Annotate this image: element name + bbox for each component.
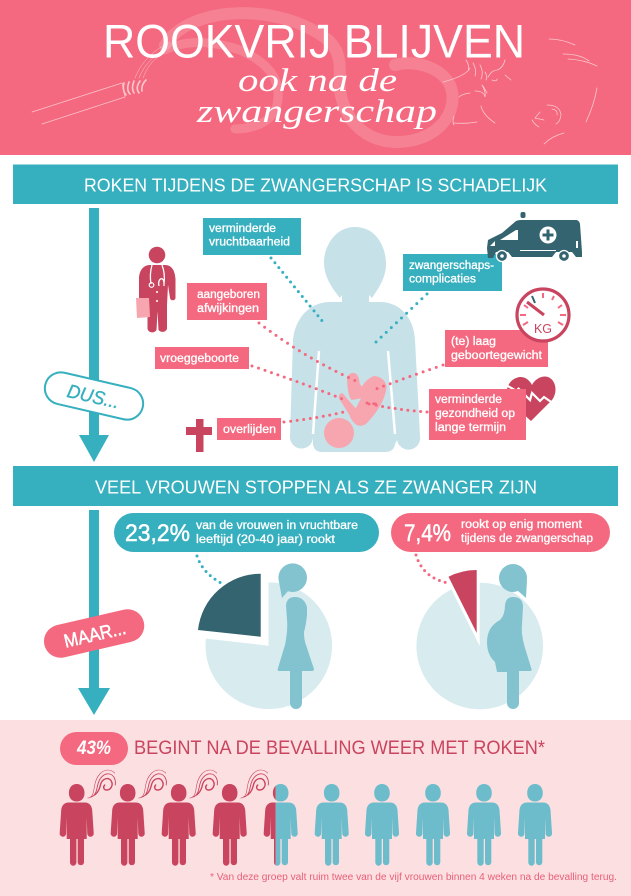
subtitle: ook na de	[238, 63, 397, 99]
pie chart: 23,2%	[197, 556, 332, 709]
heading: begint weer met roken: BEGINT NA DE BEVALLING WEER MET ROKEN*	[134, 737, 545, 759]
label: te laag geboortegewicht: (te) laag	[451, 336, 496, 348]
smoke swirl background	[165, 13, 453, 142]
label: overlijden	[217, 418, 281, 440]
arrow: second down arrow	[78, 510, 110, 715]
title: ROOKVRIJ BLIJVEN	[103, 14, 525, 68]
footnote: * Van deze groep valt ruim twee van de vijf vrouwen binnen 4 weken na de bevalling terug.	[210, 872, 617, 883]
badge: 43%	[60, 732, 128, 765]
badge: dus	[42, 369, 146, 423]
label: verminderde gezondheid: verminderde	[435, 394, 502, 406]
label: overlijden: overlijden	[223, 424, 276, 436]
callout: 23,2%: van de vrouwen in vruchtbare	[196, 520, 358, 532]
callout: 7,4%: tijdens de zwangerschap	[461, 533, 593, 545]
label: verminderde gezondheid	[429, 389, 526, 440]
section heading: stoppen	[13, 466, 618, 506]
icon: doctor	[136, 247, 176, 332]
badge: maar: MAAR...	[62, 618, 128, 653]
label: vroeggeboorte	[155, 347, 249, 369]
label: te laag geboortegewicht	[445, 330, 548, 367]
label: verminderde gezondheid: lange termijn	[435, 422, 506, 434]
callout: 7,4%	[391, 513, 610, 552]
icon: ambulance	[487, 212, 582, 262]
label: verminderde vruchtbaarheid: vruchtbaarheid	[209, 236, 290, 248]
label: zwangerschapscomplicaties: zwangerschaps-	[409, 260, 494, 272]
label: aangeboren afwijkingen	[187, 283, 267, 320]
callout: 23,2%	[114, 513, 379, 552]
icon: weighing scale: KG	[534, 322, 552, 336]
figure: fetus	[324, 373, 387, 448]
icon: heart with pulse	[506, 376, 555, 421]
arrow: first down arrow	[79, 208, 109, 462]
figure: woman	[278, 563, 314, 709]
label: te laag geboortegewicht: geboortegewicht	[451, 350, 543, 362]
callout: 23,2%: leeftijd (20-40 jaar) rookt	[196, 534, 336, 546]
dotted connector lines	[252, 258, 443, 422]
subtitle	[196, 63, 437, 130]
cigarette line drawing	[32, 42, 170, 124]
label: vroeggeboorte: vroeggeboorte	[160, 353, 239, 365]
badge: dus: DUS...	[65, 381, 121, 414]
icon: weighing scale	[517, 289, 569, 341]
subtitle: zwangerschap	[196, 94, 437, 130]
smoke swirls	[88, 770, 268, 798]
icon: cross	[186, 419, 212, 452]
badge: maar	[41, 606, 148, 661]
callout: 7,4%: 7,4%	[404, 520, 451, 547]
label: verminderde gezondheid: gezondheid op	[435, 408, 515, 420]
split woman	[264, 784, 298, 866]
label: verminderde vruchtbaarheid: verminderde	[209, 223, 276, 235]
label: zwangerschapscomplicaties: complicaties	[409, 274, 476, 286]
red smoking women	[60, 784, 247, 866]
panel: terugval	[0, 720, 631, 896]
figure: woman silhouette	[290, 227, 420, 452]
callout: 23,2%: 23,2%	[125, 520, 190, 547]
label: aangeboren afwijkingen: aangeboren	[197, 289, 260, 301]
callout: 7,4%: rookt op enig moment	[461, 519, 583, 531]
label: verminderde vruchtbaarheid	[203, 218, 301, 255]
figure: pregnant woman	[487, 564, 532, 709]
section heading: schadelijk	[13, 164, 618, 204]
mother and baby line drawing	[443, 39, 597, 144]
label: zwangerschapscomplicaties	[403, 254, 502, 291]
pie chart: 7,4%	[416, 555, 543, 709]
section heading: schadelijk: ROKEN TIJDENS DE ZWANGERSCHAP IS SCHADELIJK	[84, 174, 548, 196]
section heading: stoppen: VEEL VROUWEN STOPPEN ALS ZE ZWANGER ZIJN	[95, 476, 537, 498]
header panel	[0, 0, 631, 155]
badge: 43%: 43%	[76, 738, 111, 759]
teal women	[315, 784, 552, 866]
label: aangeboren afwijkingen: afwijkingen	[197, 303, 259, 315]
